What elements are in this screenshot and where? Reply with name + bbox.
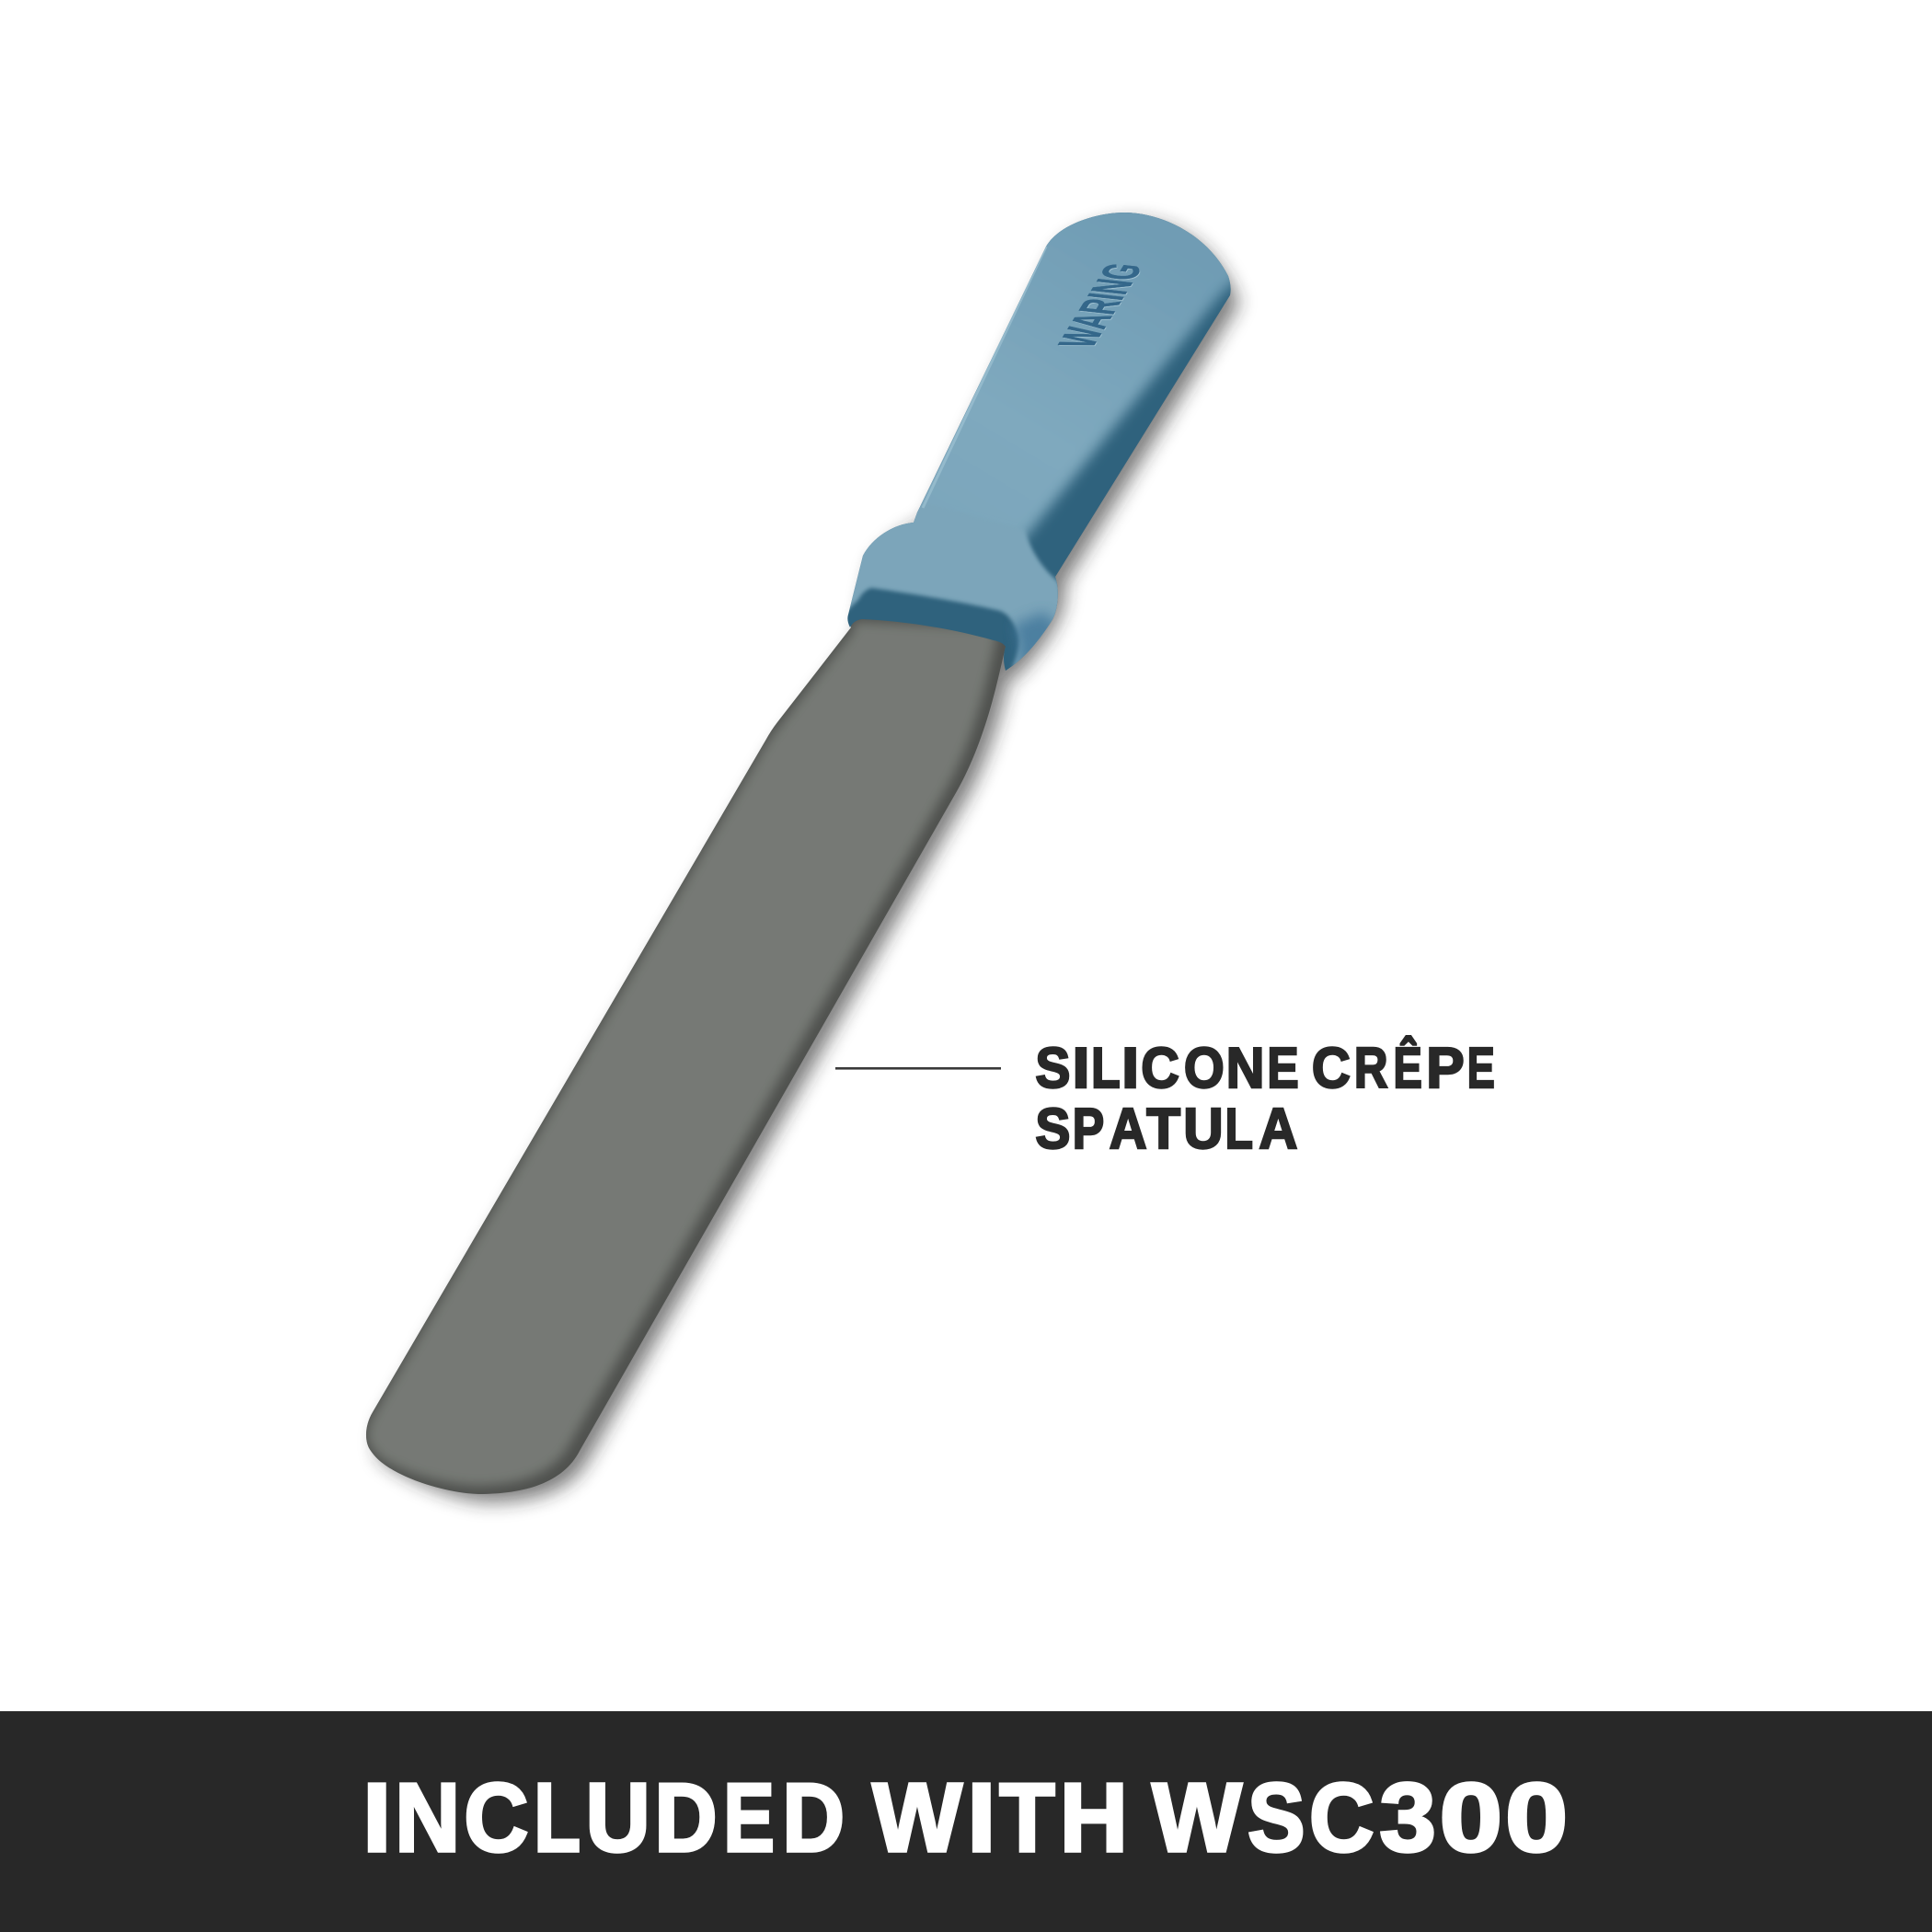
blade [350, 607, 1030, 1509]
drop shadow [377, 221, 1239, 1502]
callout label: P [1426, 1037, 1465, 1100]
callout label: E [1467, 1037, 1495, 1100]
callout label: I [1073, 1037, 1089, 1100]
callout label: L [1091, 1037, 1121, 1100]
callout label: A [1259, 1098, 1297, 1161]
banner heading: D [654, 1764, 718, 1872]
banner heading: 0 [1505, 1764, 1568, 1872]
handle dark underside [847, 213, 1231, 671]
banner heading: I [362, 1764, 391, 1872]
callout label: S [1035, 1098, 1070, 1161]
banner heading: U [585, 1764, 650, 1872]
callout label: C [1312, 1037, 1351, 1100]
banner heading: L [534, 1764, 581, 1872]
banner heading: C [464, 1764, 528, 1872]
banner heading: I [967, 1764, 995, 1872]
banner heading: D [782, 1764, 845, 1872]
callout label: U [1183, 1098, 1224, 1161]
callout label: P [1073, 1098, 1104, 1161]
callout label: R [1354, 1037, 1388, 1100]
callout label: L [1225, 1098, 1253, 1161]
callout label: T [1146, 1098, 1180, 1161]
callout label: S [1035, 1037, 1070, 1100]
banner heading: W [872, 1764, 962, 1872]
handle shaft face [883, 213, 1231, 543]
callout label: E [1267, 1037, 1299, 1100]
banner heading: 0 [1440, 1764, 1502, 1872]
spatula illustration [350, 193, 1256, 1509]
banner heading: W [1152, 1764, 1242, 1872]
banner heading: 3 [1380, 1764, 1436, 1872]
callout label: O [1184, 1037, 1225, 1100]
handle left highlight [923, 247, 1046, 508]
callout label: C [1141, 1037, 1179, 1100]
embossed logo: WARING [1048, 261, 1153, 350]
handle [847, 213, 1231, 671]
collar face [849, 508, 1058, 666]
collar side tone [1014, 609, 1054, 662]
banner heading: S [1248, 1764, 1305, 1872]
callout label: A [1110, 1098, 1146, 1161]
embossed logo: WARING [1049, 262, 1154, 351]
banner heading: N [395, 1764, 460, 1872]
banner heading: T [999, 1764, 1055, 1872]
callout leader line [835, 1067, 1001, 1070]
banner heading: H [1060, 1764, 1128, 1872]
callout label [1035, 1037, 1495, 1161]
callout label: N [1226, 1037, 1264, 1100]
callout label: I [1121, 1037, 1139, 1100]
banner heading: E [723, 1764, 775, 1872]
callout label: Ê [1393, 1037, 1422, 1100]
footer banner [0, 1711, 1932, 1932]
banner heading: C [1309, 1764, 1374, 1872]
